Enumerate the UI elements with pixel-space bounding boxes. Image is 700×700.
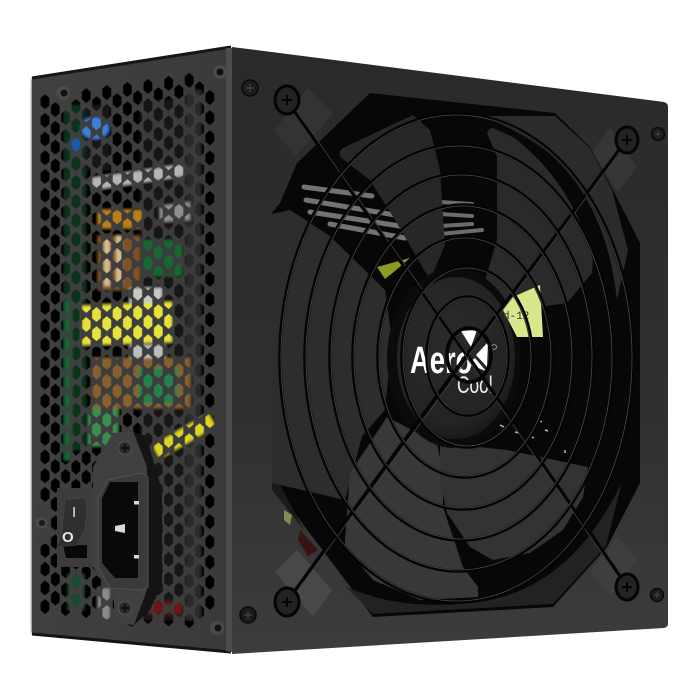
blade: lower left (345, 417, 478, 600)
socket screws (118, 442, 132, 614)
grille ring highlights (281, 115, 632, 601)
registered mark (492, 344, 496, 350)
logo word Aero: Aero (410, 340, 472, 382)
label text on part: d-12 (503, 311, 529, 323)
socket frame (98, 473, 148, 590)
grille screws (275, 86, 638, 616)
interior seen through the vents (32, 48, 231, 651)
grille rings (280, 114, 633, 602)
hub shadow (387, 268, 521, 448)
logo word Cool: Cool (457, 372, 493, 399)
panel: fan face (232, 47, 668, 654)
switch plate (57, 488, 96, 567)
fan hub (397, 277, 515, 439)
rear face bottom lip (32, 634, 231, 652)
gasket strips (275, 88, 637, 617)
internal heatsink (304, 187, 482, 238)
fan blades (272, 115, 593, 600)
yellow parts (377, 258, 543, 337)
fan housing ring (272, 116, 628, 614)
grille spokes (287, 100, 629, 602)
mounting screws (240, 80, 664, 623)
socket plate (93, 431, 147, 625)
product illustration: power supply unit (30, 46, 668, 654)
Aerocool logo (410, 330, 496, 399)
red capacitor glimpse (298, 530, 318, 556)
switch mark I: I (72, 504, 76, 521)
socket cavity (102, 482, 138, 578)
logo pinwheel (461, 330, 488, 371)
circuit specks (500, 420, 565, 453)
AC inlet socket (57, 431, 162, 627)
rear face top lip (32, 47, 231, 78)
panel: perforated rear face (32, 48, 231, 651)
black flange (120, 431, 162, 627)
rear screws (35, 65, 227, 635)
fan opening (272, 93, 640, 617)
rocker switch (57, 498, 87, 547)
socket pins (115, 501, 139, 558)
blade: upper right (483, 128, 593, 313)
corner edge strip (226, 48, 232, 652)
switch lower shadow (63, 545, 87, 558)
blade: upper left (340, 115, 445, 280)
fan grille (280, 100, 633, 602)
blade: lower right (440, 443, 588, 560)
blade: left (272, 210, 392, 500)
switch mark O: O (62, 529, 74, 546)
